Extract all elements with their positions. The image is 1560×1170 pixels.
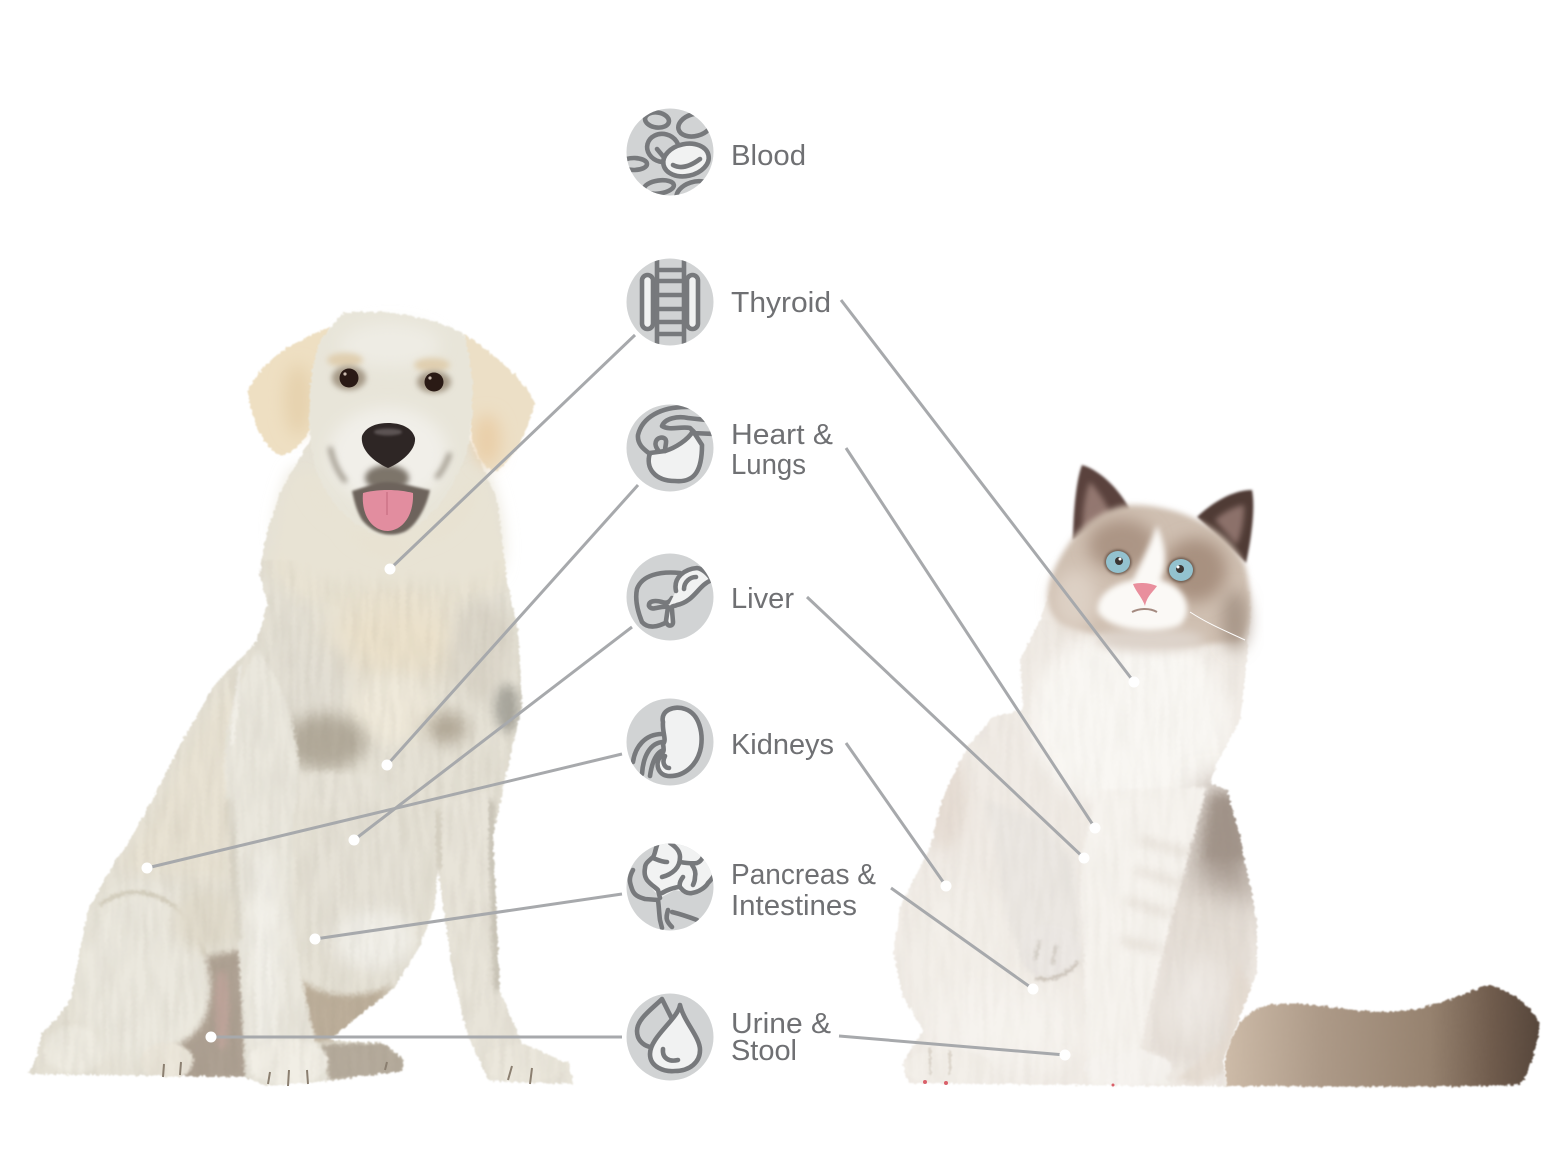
line: dog heart	[387, 485, 638, 765]
label: Blood: Blood	[731, 140, 806, 172]
icon: blood	[626, 108, 714, 196]
dog neck ruff	[277, 460, 502, 583]
cat right ear	[1197, 490, 1253, 563]
icon: pancreas and intestines	[626, 840, 716, 930]
dog right foreleg	[438, 790, 573, 1086]
cat claws	[923, 1080, 1114, 1086]
dog left foreleg	[226, 655, 317, 1080]
right ear	[463, 333, 535, 472]
dog face	[309, 312, 472, 538]
line: dog thyroid	[390, 335, 635, 569]
cat foreleg	[1080, 787, 1207, 1085]
icon: urine and stool	[626, 994, 714, 1080]
dog hind leg	[84, 898, 204, 1054]
label: Urine and Stool: Stool	[731, 1035, 797, 1067]
cat tail	[1225, 985, 1540, 1087]
line: dog urine	[211, 1036, 622, 1038]
label: Heart and Lungs: Heart &	[731, 419, 833, 451]
label: Heart and Lungs: Lungs	[731, 449, 806, 481]
icon: kidneys	[626, 698, 714, 786]
cat raised leg	[985, 800, 1082, 975]
label: Pancreas and Intestines: Intestines	[731, 890, 857, 922]
callout lines to dog	[147, 335, 638, 1037]
cat head fur	[1048, 505, 1250, 645]
label: Liver: Liver	[731, 583, 794, 615]
callout dots on cat	[940, 676, 1140, 1060]
cat left ear	[1073, 465, 1130, 540]
label: Urine and Stool: Urine &	[731, 1008, 831, 1040]
cat eyes	[1104, 550, 1194, 582]
cat head	[1048, 465, 1253, 652]
dog nose	[362, 423, 415, 468]
cat back shadow	[1190, 785, 1258, 900]
line: dog liver	[354, 627, 632, 840]
icon: liver	[626, 554, 714, 640]
line: dog kidneys	[147, 754, 622, 868]
dog body	[20, 440, 590, 1090]
label: Pancreas and Intestines	[731, 859, 876, 922]
line: cat pancreas	[891, 888, 1033, 989]
cat paws	[1146, 1052, 1171, 1075]
label: Heart and Lungs	[731, 419, 833, 481]
icon: thyroid	[626, 256, 714, 348]
callout dots on dog	[142, 564, 396, 1042]
left ear	[248, 327, 330, 456]
line: cat heart	[846, 448, 1095, 828]
cat body	[880, 590, 1280, 1090]
label: Thyroid: Thyroid	[731, 287, 831, 319]
cat face blaze and muzzle	[1098, 525, 1187, 630]
dog head	[248, 312, 535, 583]
dog photo	[20, 312, 590, 1090]
line: dog pancreas	[315, 894, 622, 939]
cat belly behind foreleg	[1152, 883, 1256, 1062]
line: cat urine	[839, 1036, 1065, 1055]
label: Kidneys: Kidneys	[731, 729, 834, 761]
cat photo	[880, 465, 1540, 1090]
dog muzzle shadow	[365, 465, 409, 491]
cat nose	[1133, 583, 1157, 606]
label: Pancreas and Intestines: Pancreas &	[731, 859, 876, 891]
line: cat kidneys	[846, 743, 946, 886]
icon: heart and lungs	[626, 404, 715, 492]
dog mouth and tongue	[352, 482, 430, 535]
dog toes	[163, 1062, 532, 1086]
line: cat liver	[807, 597, 1084, 858]
callout lines to cat	[807, 300, 1134, 1055]
line: cat thyroid	[841, 300, 1134, 682]
label: Urine and Stool	[731, 1008, 831, 1067]
dog paws	[156, 1043, 196, 1078]
dog eyes	[332, 366, 451, 393]
